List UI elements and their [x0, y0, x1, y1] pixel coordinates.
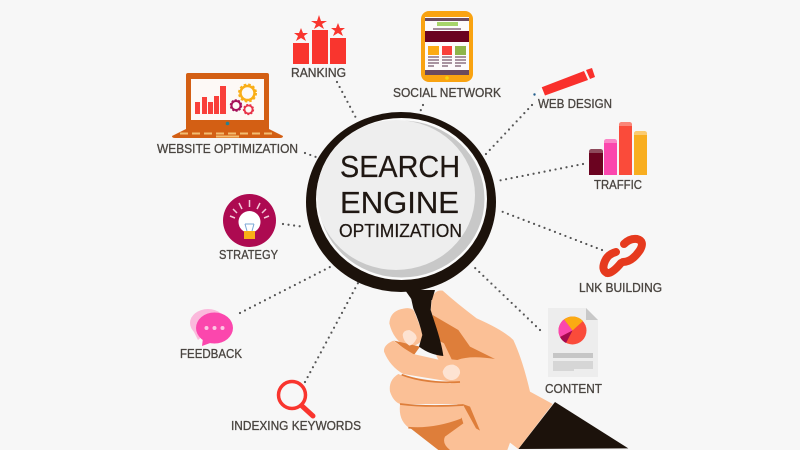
icon: pencil: [533, 68, 595, 96]
label: feedback: FEEDBACK: [180, 347, 243, 361]
heading: engine: ENGINE: [340, 185, 459, 220]
little finger: [400, 405, 464, 428]
fingernails: [403, 330, 417, 346]
heading: search: SEARCH: [340, 149, 460, 184]
hand holding magnifier: [384, 291, 628, 450]
handle: [410, 293, 443, 356]
icon: ranking bars and stars: [293, 15, 346, 64]
label: social network: SOCIAL NETWORK: [393, 86, 502, 100]
icon: tablet for social network: [421, 11, 473, 82]
thumb shadow: [433, 315, 495, 360]
label: indexing keywords: INDEXING KEYWORDS: [231, 419, 361, 433]
label: ranking: RANKING: [291, 66, 346, 80]
icon: feedback speech bubbles: [190, 309, 233, 346]
finger shadow: [394, 341, 420, 356]
icon: laptop with chart and gears: [172, 73, 283, 138]
label: traffic: TRAFFIC: [594, 178, 642, 192]
heading: optimization: OPTIMIZATION: [339, 221, 462, 241]
icon: strategy light bulb: [223, 194, 276, 247]
label: link building: LNK BUILDING: [579, 281, 662, 295]
ring finger: [390, 374, 469, 404]
finger creases: [400, 375, 463, 428]
label: strategy: STRATEGY: [219, 248, 279, 262]
icon: chain link: [603, 239, 642, 273]
dotted connector lines: [240, 82, 602, 382]
lens text: [339, 149, 462, 241]
sleeve: [518, 402, 628, 449]
fingers: [384, 308, 469, 428]
magnifying glass lens: [306, 112, 496, 300]
index finger: [389, 308, 424, 347]
label: website optimization: WEBSITE OPTIMIZATION: [157, 142, 298, 156]
label: web design: WEB DESIGN: [538, 97, 612, 111]
label: content: CONTENT: [545, 382, 602, 396]
icon: content document with pie chart: [548, 308, 598, 377]
palm shadow below fingers: [408, 413, 470, 450]
icon: red magnifying glass: [278, 382, 313, 416]
back of hand: [430, 291, 553, 450]
icon: traffic bar chart: [589, 122, 647, 175]
middle finger: [384, 341, 460, 382]
